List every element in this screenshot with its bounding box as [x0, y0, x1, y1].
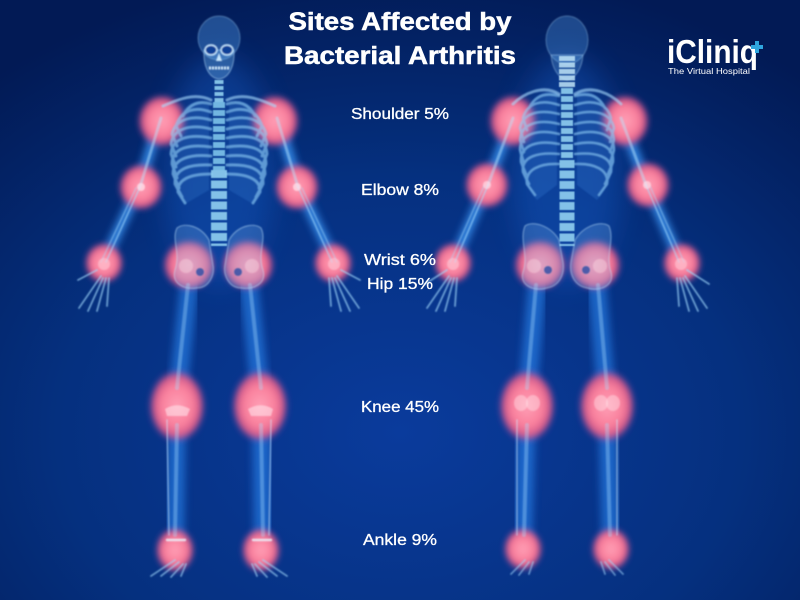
hips	[162, 239, 275, 291]
label: elbow: Elbow 8%	[361, 182, 439, 199]
logo tagline: The Virtual Hospital	[668, 66, 750, 76]
knees	[498, 369, 636, 443]
elbows	[118, 163, 320, 211]
body glow: back	[453, 55, 681, 545]
elbows	[464, 161, 671, 209]
logo plus icon	[751, 41, 763, 53]
wrists	[433, 242, 702, 284]
title: Bacterial Arthritis	[284, 42, 516, 70]
logo: iCliniq	[667, 33, 763, 76]
skeleton right half	[225, 97, 360, 577]
skeleton: back view	[425, 16, 709, 575]
ankles	[503, 527, 631, 571]
wrists	[84, 242, 353, 284]
skeleton left half	[425, 90, 563, 575]
skeleton left half	[78, 97, 213, 577]
ankles	[155, 527, 281, 573]
title: Sites Affected by	[288, 8, 512, 36]
shoulders	[488, 94, 650, 148]
joint highlights: back	[433, 94, 702, 571]
hips	[513, 239, 622, 291]
label: shoulder: Shoulder 5%	[351, 106, 449, 123]
skeleton: front view	[78, 16, 360, 577]
shoulders	[137, 94, 300, 148]
label: wrist: Wrist 6%	[364, 252, 436, 269]
body glow: front	[103, 55, 335, 545]
skeleton right half	[571, 90, 709, 575]
spine	[214, 80, 224, 246]
site labels	[351, 106, 449, 549]
joint highlights: front	[84, 94, 353, 573]
label: knee: Knee 45%	[361, 399, 439, 416]
spine	[559, 56, 575, 246]
title	[284, 8, 516, 70]
logo wordmark: iCliniq	[667, 33, 758, 70]
skull	[546, 16, 588, 80]
label: hip: Hip 15%	[367, 276, 433, 293]
knees	[148, 369, 289, 443]
label: ankle: Ankle 9%	[363, 532, 437, 549]
skull	[198, 16, 240, 79]
